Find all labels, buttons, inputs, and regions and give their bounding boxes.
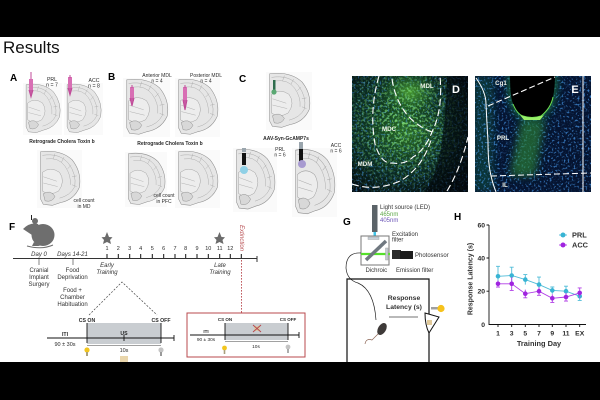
- panel C: GCaMP injection and fibre: n = 6: [330, 148, 342, 154]
- axis tick labels: [477, 222, 585, 338]
- panel A: retrograde tracing PRL and ACC: n = 8: [88, 84, 100, 90]
- panel letter A: A: [10, 73, 17, 84]
- panel F: behavioural timeline: [9, 215, 305, 362]
- panel letter F: F: [9, 222, 15, 233]
- top black bar: [0, 0, 600, 37]
- early training trial diagram: CS ON: [79, 318, 95, 324]
- title: Results: [3, 38, 60, 57]
- training day numbers: 8: [184, 246, 187, 252]
- response latency label: [386, 295, 422, 311]
- training day numbers: 12: [227, 246, 233, 252]
- training day numbers: [105, 246, 233, 252]
- panel D: micrograph of MD: MDC: [382, 126, 397, 133]
- light source label: 465nm: [380, 212, 398, 218]
- timeline labels: Chamber: [60, 295, 85, 301]
- extinction trial diagram: 10s: [252, 344, 260, 350]
- ACC label: ACC: [89, 78, 100, 84]
- timeline labels: Food: [66, 268, 79, 274]
- training day numbers: 10: [205, 246, 211, 252]
- axis tick labels: 20: [477, 288, 485, 296]
- timeline labels: Training: [96, 270, 118, 276]
- cell count label: cell count: [73, 198, 95, 204]
- icon: stars: [102, 232, 225, 244]
- icon: mouse in chamber: [365, 321, 389, 344]
- ACC label: ACC: [331, 143, 342, 149]
- extinction label: Extinction: [238, 225, 244, 252]
- timeline labels: Food +: [63, 288, 82, 294]
- timeline labels: [28, 252, 231, 308]
- cell count label: cell count: [153, 193, 175, 199]
- panel B: anterior and posterior MDL: in PFC: [156, 199, 172, 205]
- timeline axis: [13, 254, 257, 265]
- anterior label: Anterior MDL: [142, 73, 172, 79]
- panel letter H: H: [454, 212, 461, 223]
- early training trial diagram: ITI: [62, 332, 69, 338]
- training day numbers: 1: [105, 246, 109, 252]
- caption retrograde tracer: Retrograde Cholera Toxin b: [137, 141, 203, 147]
- training day numbers: 9: [195, 246, 199, 252]
- axis tick labels: 9: [550, 330, 554, 338]
- training day numbers: 11: [217, 246, 223, 252]
- early training trial diagram: [47, 318, 174, 362]
- optics labels: Emission filter: [396, 268, 433, 274]
- extinction dashed line: [240, 260, 242, 313]
- timeline labels: Day 0: [31, 252, 47, 258]
- timeline labels: Implant: [29, 275, 49, 281]
- axis tick labels: 5: [523, 330, 527, 338]
- panel A: retrograde tracing PRL and ACC: in MD: [77, 204, 91, 210]
- panel B: anterior and posterior MDL: [108, 72, 222, 208]
- panel D: micrograph of MD: [352, 76, 468, 192]
- series PRL: [496, 266, 582, 300]
- icon: lit bulb: [431, 305, 445, 312]
- training day numbers: 7: [173, 246, 177, 252]
- timeline labels: Surgery: [28, 282, 50, 288]
- PRL label: PRL: [47, 77, 57, 83]
- panel letter C: C: [239, 74, 246, 85]
- response latency label: Response: [388, 295, 420, 302]
- training day numbers: 2: [117, 246, 120, 252]
- panel C: GCaMP injection and fibre: [233, 72, 342, 217]
- caption retrograde tracer: Retrograde Cholera Toxin b: [29, 139, 95, 145]
- extinction trial diagram: [187, 313, 305, 357]
- optical cube: [361, 236, 390, 265]
- light source label: [380, 205, 430, 224]
- icon: food: [120, 356, 128, 362]
- panel B: anterior and posterior MDL: n = 4: [151, 78, 163, 84]
- brain section posterior MDL: [175, 78, 220, 137]
- training day numbers: 3: [128, 246, 131, 252]
- bottom black bar: [0, 362, 600, 400]
- icon: grey bulb: [286, 345, 290, 353]
- food port: [425, 313, 439, 333]
- axis tick labels: 60: [477, 222, 485, 230]
- axis tick labels: EX: [575, 330, 585, 338]
- timeline labels: Early: [100, 263, 115, 269]
- brain section ACC with fibre: [292, 142, 337, 217]
- region labels: MDL: [420, 83, 434, 90]
- training day numbers: 5: [151, 246, 154, 252]
- icon: yellow bulb: [222, 346, 227, 354]
- latency arrow: [389, 316, 418, 318]
- early training trial diagram: 90 ± 30s: [54, 342, 76, 348]
- axis tick labels: 3: [510, 330, 514, 338]
- response latency label: Latency (s): [386, 304, 422, 311]
- legend: PRL: [572, 230, 587, 240]
- icon: omitted reward: [253, 325, 261, 332]
- PRL label: PRL: [275, 147, 285, 153]
- timeline labels: Late: [214, 263, 226, 269]
- timeline labels: Training: [209, 270, 231, 276]
- timeline labels: Days 14-21: [57, 252, 88, 258]
- early training trial diagram: US: [120, 331, 128, 337]
- panel G: fibre photometry setup: [343, 205, 449, 362]
- fibre cable: [346, 253, 376, 320]
- virus caption: AAV-Syn-GcAMP7s: [263, 136, 309, 142]
- extinction trial diagram: 90 ± 30s: [197, 337, 216, 343]
- extinction trial diagram: ITI: [203, 329, 209, 334]
- behaviour chamber: [347, 279, 429, 362]
- region labels: Cg1: [495, 80, 507, 87]
- panel H: response latency line chart: Response Latency (s): [468, 243, 474, 315]
- panel E: micrograph of PRL with fibre track: IL: [502, 182, 508, 189]
- panel C: GCaMP injection and fibre: n = 6: [274, 152, 286, 158]
- brain section PRL with fibre: [233, 148, 277, 212]
- brain section PRL with syringe: [23, 72, 62, 135]
- axes: [486, 225, 586, 327]
- panel letter B: B: [108, 72, 115, 83]
- LED light source rod: [372, 205, 378, 232]
- photosensor: [392, 250, 413, 259]
- panel B: anterior and posterior MDL: n = 4: [200, 78, 212, 84]
- brain section MD with green virus: [266, 72, 312, 130]
- training day numbers: 6: [162, 246, 165, 252]
- axis tick labels: 7: [537, 330, 541, 338]
- panel H: response latency line chart: [454, 212, 589, 348]
- timeline labels: Habituation: [57, 302, 88, 308]
- axis tick labels: 11: [562, 330, 570, 338]
- brain sections cell count PFC: [125, 150, 220, 208]
- optics labels: Excitation: [392, 232, 418, 238]
- panel letter E: E: [571, 84, 579, 96]
- timeline labels: Deprivation: [57, 275, 88, 281]
- brain section anterior MDL: [123, 78, 170, 137]
- legend: [559, 230, 589, 250]
- panel letter D: D: [452, 84, 460, 96]
- axis titles: Training Day: [517, 339, 562, 348]
- panel A: retrograde tracing PRL and ACC: [10, 72, 103, 210]
- optics labels: Dichroic: [366, 268, 387, 274]
- legend: ACC: [572, 240, 589, 250]
- brain section cell count MD: [37, 150, 82, 208]
- icon: mouse: [23, 215, 54, 248]
- axis tick labels: 40: [477, 256, 485, 262]
- dashed zoom lines: [89, 282, 157, 315]
- icon: yellow bulb: [84, 347, 90, 356]
- panel E: micrograph of PRL with fibre track: [475, 76, 591, 192]
- axis tick labels: 0: [481, 322, 485, 329]
- optics labels: filter: [392, 238, 403, 244]
- timeline labels: Cranial: [29, 268, 49, 274]
- axis tick labels: 1: [496, 330, 500, 338]
- early training trial diagram: CS OFF: [151, 318, 171, 324]
- extinction trial diagram: CS ON: [218, 317, 232, 322]
- light source label: Light source (LED): [380, 205, 430, 211]
- extinction trial diagram: CS OFF: [280, 317, 297, 322]
- brain section ACC with syringe: [64, 75, 103, 135]
- icon: grey bulb: [158, 347, 164, 356]
- panel letter G: G: [343, 217, 351, 228]
- optics labels: [366, 232, 449, 274]
- training day numbers: 4: [139, 246, 142, 252]
- panel E: micrograph of PRL with fibre track: PRL: [497, 135, 509, 142]
- posterior label: Posterior MDL: [190, 73, 222, 79]
- series ACC: [496, 277, 582, 302]
- optics labels: Photosensor: [415, 253, 449, 259]
- panel D: micrograph of MD: MDM: [358, 161, 372, 168]
- light source label: 405nm: [380, 218, 398, 224]
- panel A: retrograde tracing PRL and ACC: n = 7: [46, 82, 58, 88]
- early training trial diagram: 10s: [120, 348, 129, 354]
